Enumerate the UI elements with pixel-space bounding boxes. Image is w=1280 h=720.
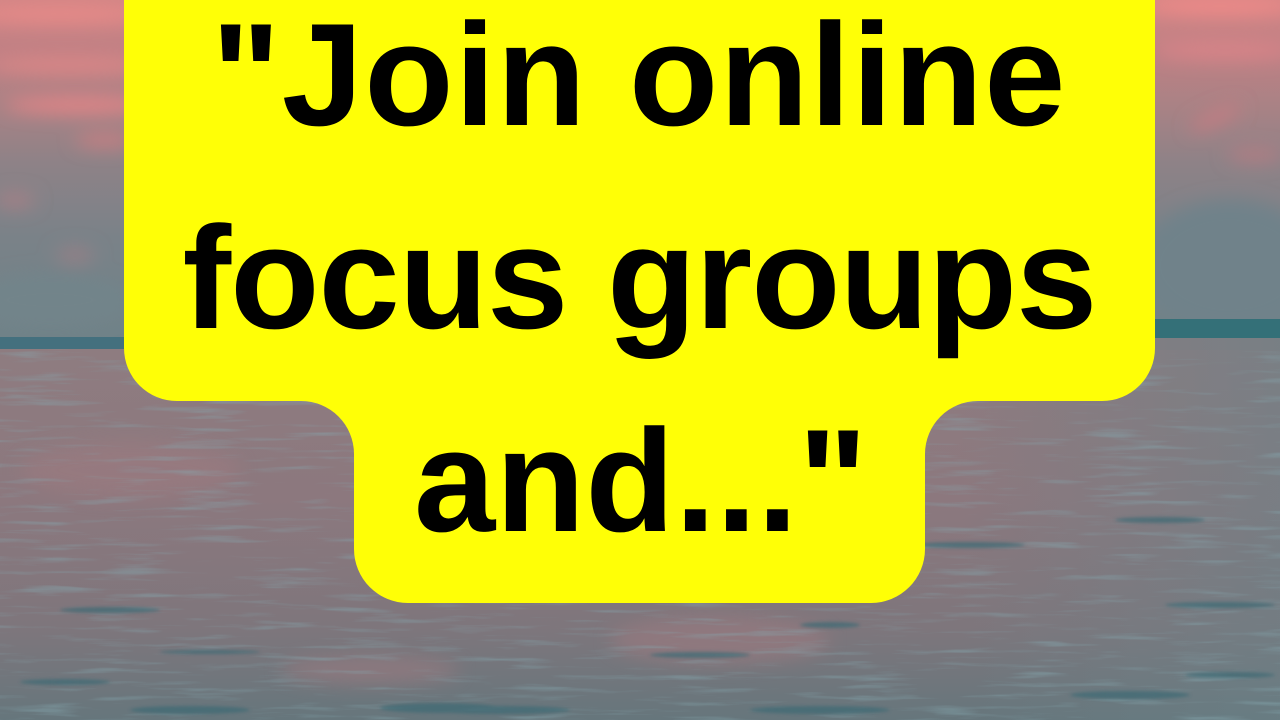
line 2: focus groups bbox=[183, 196, 1096, 359]
line 3: and..." bbox=[414, 399, 868, 562]
horizon left bbox=[0, 337, 130, 349]
horizon right bbox=[1150, 319, 1280, 338]
water ripples bbox=[0, 349, 1280, 720]
